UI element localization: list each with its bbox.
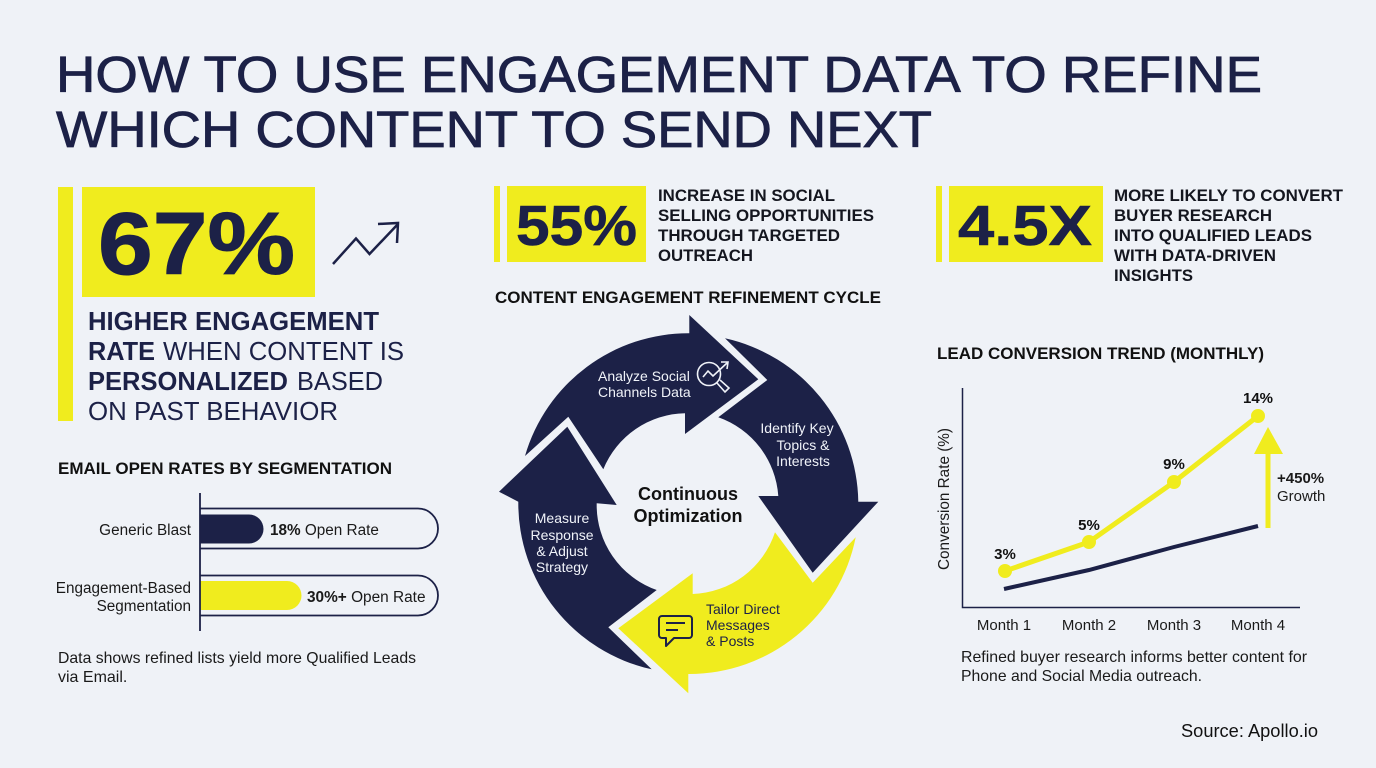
text: 67% description: HIGHER ENGAGEMENT — [88, 306, 379, 336]
text: chart note — [961, 649, 1308, 685]
heading: email open rates: EMAIL OPEN RATES BY SEGMENTATION — [58, 459, 392, 478]
line: baseline navy — [1004, 526, 1258, 589]
title: WHICH CONTENT TO SEND NEXT — [56, 101, 932, 158]
title — [56, 46, 1262, 158]
heading: lead conversion trend: LEAD CONVERSION TREND (MONTHLY) — [937, 344, 1264, 363]
text: 67% description: ON PAST BEHAVIOR — [88, 396, 338, 426]
text: growth label: +450% — [1277, 470, 1324, 487]
text: 67% description: PERSONALIZED — [88, 366, 288, 396]
arrow: measure response and adjust strategy: & Adjust — [536, 543, 588, 559]
bar: generic blast: Generic Blast — [99, 522, 192, 539]
arrow: identify key topics and interests: Identify Key — [760, 420, 834, 436]
data labels: 3% — [994, 546, 1016, 563]
data labels — [994, 390, 1273, 563]
arrow: identify key topics and interests — [718, 338, 878, 573]
month labels: Month 1 — [977, 617, 1031, 634]
text: 67% description: BASED — [297, 366, 383, 396]
title: HOW TO USE ENGAGEMENT DATA TO REFINE — [56, 46, 1262, 103]
text: chart note: Phone and Social Media outreach. — [961, 668, 1202, 685]
month labels: Month 3 — [1147, 617, 1201, 634]
text: email note: Data shows refined lists yield more Qualified Leads — [58, 650, 416, 667]
text: 67% description: RATE — [88, 336, 155, 366]
text: continuous optimization: Continuous — [638, 484, 738, 504]
text: 4.5X description: INSIGHTS — [1114, 266, 1193, 285]
arrow: tailor direct messages and posts — [618, 532, 856, 693]
chart: cycle diagram — [499, 315, 878, 693]
panel: 55% stat — [494, 186, 646, 262]
text: 55% description — [658, 186, 874, 265]
arrow: measure response and adjust strategy: Strategy — [536, 559, 588, 575]
arrow: identify key topics and interests: Topics & — [777, 437, 830, 453]
bar: generic blast — [99, 508, 438, 548]
bar chart: email open rates — [56, 493, 438, 631]
bar: engagement-based segmentation: 30%+ Open Rate — [307, 589, 426, 606]
line chart: lead conversion trend — [936, 388, 1325, 634]
line: conversion yellow — [998, 409, 1265, 578]
bar: engagement-based segmentation: Engagement-Based — [56, 580, 191, 597]
arrow: analyze social channels data — [525, 315, 758, 469]
bar: generic blast: 18% Open Rate — [270, 522, 379, 539]
icon: magnifier chart — [698, 362, 729, 392]
arrow: growth — [1254, 427, 1283, 528]
text: 55% description: INCREASE IN SOCIAL — [658, 186, 835, 205]
text: 4.5X description: WITH DATA-DRIVEN — [1114, 246, 1276, 265]
text: 67% description — [88, 306, 404, 426]
icon: chat bubble — [659, 616, 692, 646]
text: growth label: Growth — [1277, 488, 1325, 505]
panel: 67% stat — [58, 187, 315, 421]
data labels: 14% — [1243, 390, 1273, 407]
text: email note: via Email. — [58, 669, 127, 686]
text: 4.5X description: MORE LIKELY TO CONVERT — [1114, 186, 1344, 205]
text: 55% description: THROUGH TARGETED — [658, 226, 840, 245]
arrow: identify key topics and interests: Interests — [776, 453, 830, 469]
text: growth label — [1277, 470, 1325, 505]
text: 4.5X description: INTO QUALIFIED LEADS — [1114, 226, 1312, 245]
axis label: conversion rate: Conversion Rate (%) — [936, 428, 953, 570]
text: 4.5X description — [1114, 186, 1344, 285]
arrow: measure response and adjust strategy: Measure — [535, 510, 589, 526]
arrow: tailor direct messages and posts: Messages — [706, 617, 770, 633]
data labels: 9% — [1163, 456, 1185, 473]
text: 55% description: SELLING OPPORTUNITIES — [658, 206, 874, 225]
text: email note — [58, 650, 416, 686]
text: continuous optimization: Optimization — [634, 506, 742, 526]
bar: engagement-based segmentation — [56, 576, 438, 616]
panel: 4.5X stat — [936, 186, 1103, 262]
data labels: 5% — [1078, 517, 1100, 534]
source: Source: Apollo.io — [1181, 721, 1318, 741]
month labels: Month 2 — [1062, 617, 1116, 634]
arrow: analyze social channels data: Channels Data — [598, 384, 691, 400]
text: chart note: Refined buyer research informs better content for — [961, 649, 1308, 666]
text: 67% description: WHEN CONTENT IS — [163, 336, 404, 366]
month labels — [977, 617, 1285, 634]
arrow: tailor direct messages and posts: & Posts — [706, 633, 754, 649]
heading: refinement cycle: CONTENT ENGAGEMENT REFINEMENT CYCLE — [495, 288, 881, 307]
stat number: 4.5X: 4.5X — [958, 194, 1092, 258]
arrow: measure response and adjust strategy — [499, 427, 657, 669]
month labels: Month 4 — [1231, 617, 1285, 634]
stat number: 67%: 67% — [98, 194, 295, 293]
text: 55% description: OUTREACH — [658, 246, 753, 265]
stat number: 55%: 55% — [516, 194, 637, 258]
arrow: analyze social channels data: Analyze Social — [598, 368, 690, 384]
arrow: measure response and adjust strategy: Response — [530, 527, 594, 543]
icon: upward trend arrow — [333, 223, 398, 264]
bar: engagement-based segmentation: Segmentation — [97, 598, 191, 615]
text: 4.5X description: BUYER RESEARCH — [1114, 206, 1272, 225]
arrow: tailor direct messages and posts: Tailor Direct — [706, 601, 780, 617]
